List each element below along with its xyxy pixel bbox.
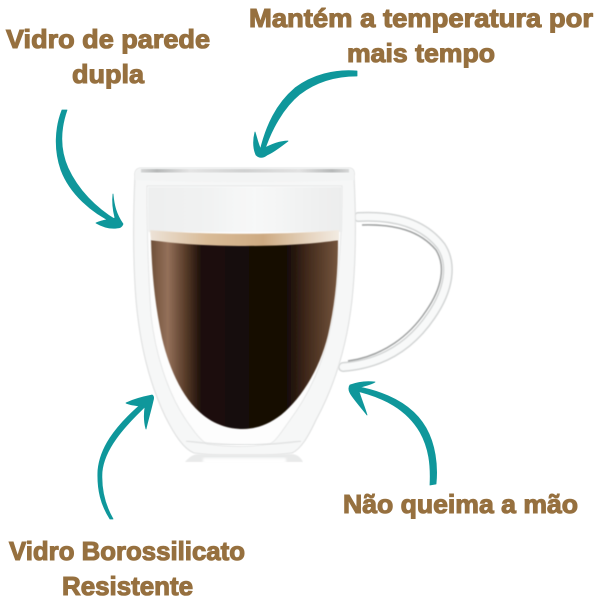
- text: double wall: Vidro de parede: [6, 24, 210, 54]
- text: keeps temperature: [249, 3, 593, 68]
- arrow: to rim: [254, 71, 357, 157]
- mug outer wall: [134, 168, 355, 456]
- rim: [135, 168, 354, 182]
- text: keeps temperature: Mantém a temperatura por: [249, 3, 593, 33]
- mug inner wall: [147, 186, 342, 446]
- text: double wall: dupla: [72, 59, 145, 89]
- base: [186, 441, 301, 445]
- empty glass above coffee: [148, 187, 342, 232]
- text: borosilicate glass: Vidro Borossilicato: [9, 536, 245, 566]
- arrow: to handle: [349, 382, 437, 485]
- crema: [150, 230, 339, 246]
- coffee: [151, 240, 338, 429]
- text: double wall: [6, 24, 210, 89]
- arrow: to base: [98, 395, 154, 519]
- text: borosilicate glass: [9, 536, 245, 600]
- text: keeps temperature: mais tempo: [347, 38, 495, 68]
- text: does not burn the hand: Não queima a mão: [343, 489, 578, 519]
- mug handle: [343, 217, 448, 367]
- icon: glass mug with coffee: [134, 168, 448, 464]
- arrow: to double wall: [56, 110, 123, 228]
